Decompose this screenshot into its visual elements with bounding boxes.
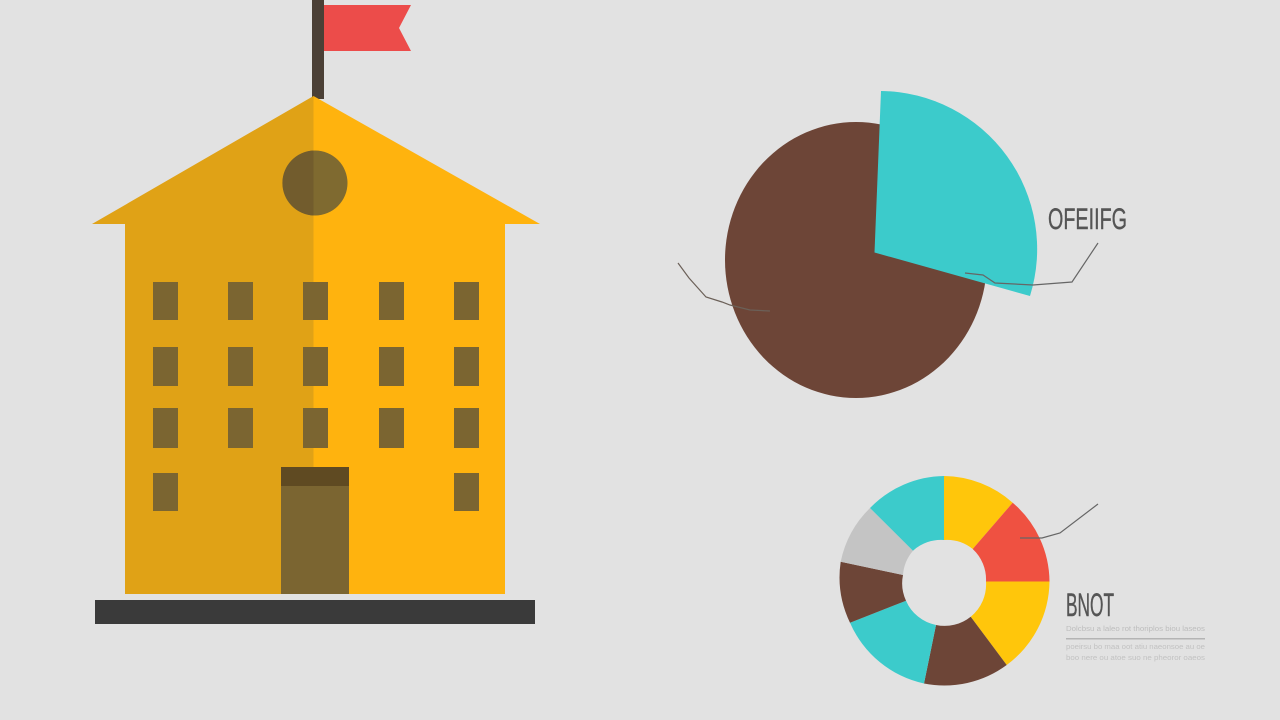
flag pole: [312, 0, 324, 99]
caption line two: poeirsu bo maa oot atiu naeonsoe au oe: [1066, 644, 1205, 651]
segment: brown left: [840, 562, 906, 623]
red flag: [324, 5, 411, 51]
segment: yellow top: [944, 476, 1013, 549]
teal pie slice: [874, 91, 1037, 296]
donut caption: [1066, 626, 1206, 662]
brown pie base: [725, 122, 987, 398]
segment: teal top: [870, 476, 944, 551]
left leader line: [678, 263, 770, 311]
right leader line: [965, 243, 1098, 285]
building body, shaded left side: [92, 96, 314, 594]
building body, lit right side: [314, 96, 540, 594]
segment: brown bottom: [924, 617, 1007, 685]
segment: red: [973, 503, 1050, 582]
label: large pie: OFEIIFG: [1048, 203, 1127, 236]
caption line three: boo nere ou atoe suo ne pheoror oaeos: [1066, 655, 1206, 662]
donut chart: [840, 476, 1050, 685]
caption rule: [1066, 638, 1205, 640]
segment: grey: [841, 508, 913, 575]
segment: yellow right: [971, 582, 1050, 665]
window grid: [153, 282, 479, 511]
door: [281, 467, 349, 594]
door lintel: [281, 467, 349, 486]
large pie chart: [725, 91, 1037, 398]
round attic window: [282, 150, 348, 216]
icon: school building: [92, 0, 540, 624]
donut leader line: [1020, 504, 1098, 538]
ground slab: [95, 600, 535, 624]
segment: teal bottom: [850, 601, 936, 684]
caption line one: Dolcbsu a laleo rot thoriplos biou laseos: [1066, 626, 1206, 633]
label: donut: BNOT: [1066, 587, 1114, 623]
